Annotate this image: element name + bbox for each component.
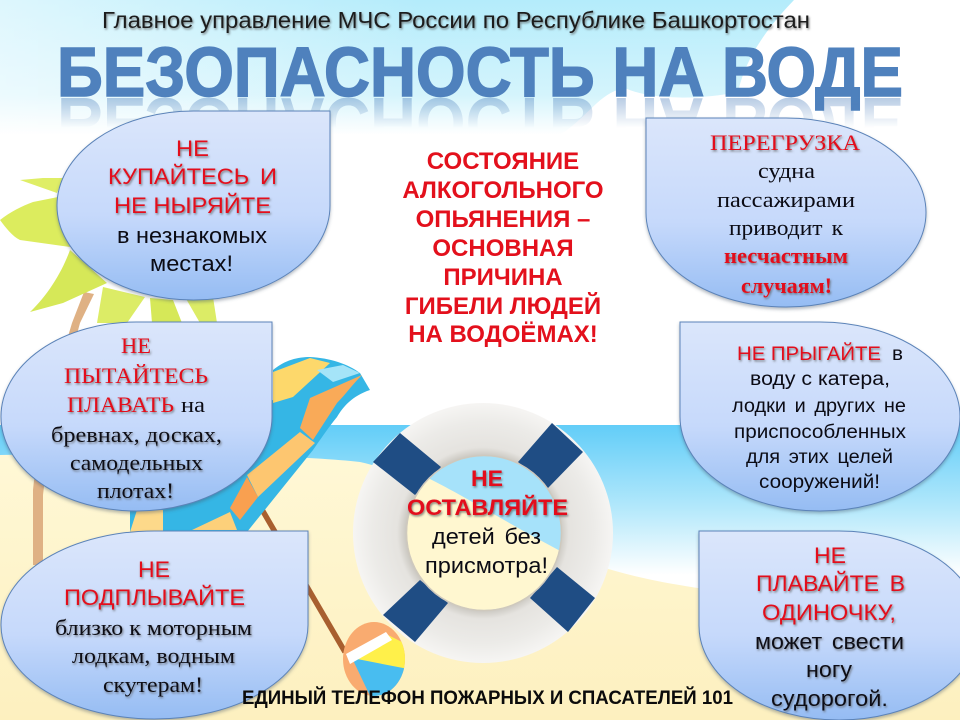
panel: do not jump from boats: приспособленных (734, 422, 907, 443)
panel: do not swim on logs: плотах! (97, 478, 174, 503)
beach ball (343, 622, 405, 696)
palm tree (0, 178, 217, 565)
life ring (353, 403, 613, 663)
panel: do not swim alone: ОДИНОЧКУ, (762, 600, 896, 625)
panel: do not swim on logs: ПЛАВАТЬ (67, 392, 174, 417)
ring text: do not leave children: детей без (432, 524, 541, 549)
panel: do not swim in unknown places: КУПАЙТЕСЬ И (108, 164, 277, 189)
panel: do not swim alone: может свести (755, 629, 904, 654)
title: БЕЗОПАСНОСТЬ НА ВОДЕ (57, 83, 903, 161)
panel: do not jump from boats: в (892, 344, 903, 365)
footer: emergency phone number: ЕДИНЫЙ ТЕЛЕФОН ПОЖАРНЫХ И СПАСАТЕЛЕЙ 101 (242, 687, 733, 709)
panel: overloading: приводит к (729, 215, 843, 240)
panel: do not swim near motor boats: близко к моторным (55, 615, 252, 640)
panel: do not swim alone: судорогой. (771, 686, 888, 711)
panel: do not swim alone: ногу (806, 657, 852, 682)
panel: do not swim alone: ПЛАВАЙТЕ В (756, 571, 905, 596)
panel: overloading: несчастным (724, 243, 848, 268)
panel: do not jump from boats: сооружений! (759, 472, 880, 493)
panel: do not swim in unknown places: в незнакомых (117, 223, 267, 248)
panel: do not swim near motor boats: ПОДПЛЫВАЙТЕ (64, 585, 245, 610)
panel: central warning about alcohol: АЛКОГОЛЬНОГО (402, 177, 604, 204)
panel: do not swim near motor boats: НЕ (138, 557, 170, 582)
panel: overloading: случаям! (741, 273, 832, 298)
panel: do not swim alone (699, 531, 960, 720)
panel: overloading: пассажирами (717, 187, 855, 212)
panel: do not swim near motor boats: скутерам! (103, 672, 203, 697)
header: organisation name: Главное управление МЧС России по Республике Башкортостан (102, 7, 810, 33)
panel: do not swim on logs: НЕ (121, 333, 151, 358)
panel: do not swim on logs: бревнах, досках, (51, 422, 222, 447)
panel: do not swim in unknown places: НЕ (176, 136, 209, 161)
panel: central warning about alcohol: НА ВОДОЁМАХ! (408, 321, 598, 348)
panel: do not swim in unknown places: местах! (150, 251, 233, 276)
panel: overloading: судна (758, 158, 815, 183)
panel: do not swim in unknown places: НЕ НЫРЯЙТЕ (114, 193, 271, 218)
title (60, 46, 902, 124)
panel: central warning about alcohol (402, 148, 604, 348)
ring text: do not leave children (407, 466, 568, 578)
panel: do not swim alone: НЕ (814, 543, 846, 568)
panel: do not swim in unknown places (57, 111, 330, 300)
panel: do not jump from boats: НЕ ПРЫГАЙТЕ (737, 343, 881, 365)
panel: do not swim near motor boats (1, 531, 308, 719)
ring text: do not leave children: ОСТАВЛЯЙТЕ (407, 495, 568, 520)
panel: do not jump from boats: лодки и других не (732, 396, 906, 417)
panel: central warning about alcohol: ГИБЕЛИ ЛЮДЕЙ (405, 292, 601, 320)
panel: central warning about alcohol: ПРИЧИНА (443, 264, 563, 291)
panel: central warning about alcohol: СОСТОЯНИЕ (427, 148, 579, 175)
title: БЕЗОПАСНОСТЬ НА ВОДЕ (57, 33, 903, 111)
panel: overloading: ПЕРЕГРУЗКА (710, 130, 860, 155)
ring text: do not leave children: присмотра! (425, 553, 548, 578)
panel: central warning about alcohol: ОСНОВНАЯ (432, 235, 574, 262)
panel: do not swim on logs: на (181, 392, 205, 417)
panel: central warning about alcohol: ОПЬЯНЕНИЯ – (416, 206, 590, 233)
panel: do not jump from boats: воду с катера, (750, 369, 890, 390)
panel: do not jump from boats: для этих целей (746, 447, 893, 468)
panel: do not swim on logs: самодельных (70, 450, 203, 475)
panel: do not swim on logs: ПЫТАЙТЕСЬ (64, 363, 208, 388)
beach umbrella (130, 357, 370, 652)
ring text: do not leave children: НЕ (471, 466, 503, 491)
panel: do not jump from boats (680, 322, 960, 511)
panel: do not swim on logs (1, 322, 272, 511)
panel: overloading (646, 118, 926, 307)
panel: do not swim near motor boats: лодкам, водным (72, 643, 235, 668)
